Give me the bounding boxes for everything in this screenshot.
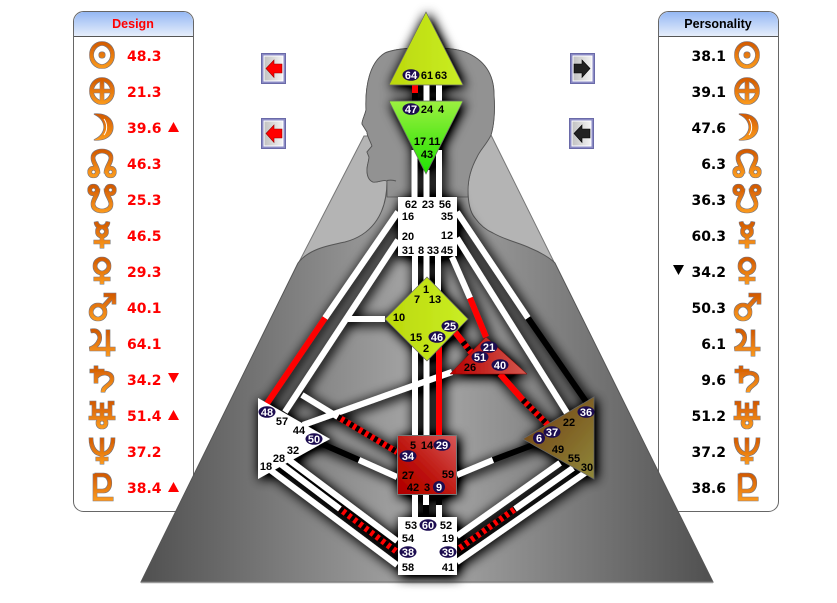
personality column: values: 34.2 (691, 265, 726, 281)
channel: 63-4 (436, 85, 442, 101)
channel: 8-1 (424, 256, 430, 280)
design column: values: 40.1 (127, 301, 162, 317)
sacral gates: 29 (436, 440, 448, 452)
ego gates: 21 (483, 342, 495, 354)
spleen gates: 32 (287, 445, 299, 457)
human silhouette (141, 48, 713, 582)
channel: 25-51 (455, 332, 474, 356)
personality column: values: 38.6 (691, 481, 726, 497)
sacral gates: 34 (402, 451, 415, 463)
channel: 10-34 (302, 395, 397, 452)
sacral gates: 27 (402, 470, 414, 482)
center: solar plexus (523, 397, 594, 479)
design column: values: 64.1 (127, 337, 162, 353)
throat gates: 35 (441, 211, 453, 223)
icon: earth (736, 80, 758, 102)
design column: values: 38.4 (127, 481, 162, 497)
channel: 61-24 (424, 85, 430, 101)
throat gates: 62 (405, 199, 417, 211)
light gray backdrop between head and shoulders (298, 135, 555, 264)
ajna gates: 4 (438, 104, 445, 116)
throat gates: 33 (427, 245, 439, 257)
channel: 32-54 (285, 457, 397, 541)
channel: 44-26 (303, 372, 452, 425)
channel: 35-36 (457, 212, 587, 403)
root gates: 58 (402, 562, 414, 574)
icon: saturn (735, 366, 757, 392)
channel: 20-57 (285, 240, 398, 412)
center: sacral (398, 436, 456, 494)
design column: values: 51.4 (127, 409, 162, 425)
icon: mars (91, 295, 114, 319)
design column: values: 21.3 (127, 85, 162, 101)
sacral gates: 42 (407, 482, 419, 494)
icon: uranus (734, 403, 760, 427)
icon: saturn (90, 366, 112, 392)
solar plexus gates (533, 406, 594, 474)
root gates: 39 (442, 547, 454, 559)
g center gates: 25 (444, 321, 456, 333)
root gates: 41 (442, 562, 454, 574)
heading: Design: Design (112, 17, 154, 31)
throat gates: 45 (441, 245, 453, 257)
sacral gates: 5 (410, 440, 416, 452)
channel: 15-5 (412, 345, 418, 517)
icon: south node (90, 186, 114, 211)
personality column: values: 6.3 (701, 157, 726, 173)
heading: Personality: Personality (684, 17, 752, 31)
throat gates: 12 (441, 230, 453, 242)
g center gates (393, 284, 458, 355)
icon: pluto (740, 474, 758, 499)
center: head (389, 12, 463, 85)
channel: 39-55 (457, 468, 573, 550)
throat gates: 20 (402, 231, 414, 243)
icon: jupiter (735, 330, 760, 356)
icon: mars (736, 295, 759, 319)
personality column: values: 37.2 (691, 445, 726, 461)
personality column: values: 50.3 (691, 301, 726, 317)
spleen gates: 18 (260, 461, 272, 473)
root gates: 38 (402, 547, 414, 559)
design column: values: 46.3 (127, 157, 162, 173)
personality column: values (673, 49, 726, 497)
design column: values (127, 49, 179, 497)
design column: values: 48.3 (127, 49, 162, 65)
center: spleen (258, 398, 330, 479)
icon: south node (735, 186, 759, 211)
icon: neptune (736, 438, 758, 464)
ego gates (464, 341, 508, 374)
solar plexus gates: 30 (581, 462, 593, 474)
root gates: 52 (440, 520, 452, 532)
solar plexus gates: 36 (580, 407, 592, 419)
design column: values: 39.6 (127, 121, 162, 137)
design column: values: 25.3 (127, 193, 162, 209)
design column: values: 37.2 (127, 445, 162, 461)
ajna gates: 24 (421, 104, 434, 116)
personality column: values: 51.2 (691, 409, 726, 425)
center: throat (398, 197, 457, 256)
g center gates: 7 (414, 294, 420, 306)
channel: 59-6 (457, 445, 533, 475)
root gates: 54 (402, 533, 415, 545)
ground line (141, 582, 713, 584)
g center gates: 15 (410, 332, 422, 344)
g center gates: 46 (431, 332, 443, 344)
channel: 46-29 (436, 345, 442, 435)
icon: mercury (94, 222, 110, 248)
channel: 64-47 (412, 85, 418, 101)
sacral gates: 9 (436, 482, 442, 494)
design column: values: 46.5 (127, 229, 162, 245)
spleen gates: 57 (276, 416, 288, 428)
icon: mercury (739, 222, 755, 248)
personality column: values: 39.1 (691, 85, 726, 101)
g center gates: 2 (423, 343, 429, 355)
channel: 21-45 (452, 257, 486, 337)
chin line (387, 179, 396, 182)
body graph (258, 12, 594, 575)
channel: 2-14 (424, 355, 430, 435)
icon: north node (90, 151, 114, 176)
personality column: values: 9.6 (701, 373, 726, 389)
ajna gates (402, 103, 445, 161)
design column: values: 29.3 (127, 265, 162, 281)
ego gates: 51 (474, 352, 486, 364)
channel: 19-49 (457, 463, 560, 536)
ajna gates: 43 (421, 149, 433, 161)
button: design back arrow bottom (262, 118, 286, 148)
channel: 18-58 (263, 464, 397, 565)
root gates: 60 (422, 520, 434, 532)
channel: 11-56 (436, 150, 442, 197)
panel: Personality (658, 12, 778, 512)
channel: 16-48 (266, 212, 398, 405)
throat gates: 8 (418, 245, 424, 257)
head gates: 63 (435, 70, 447, 82)
icon: pluto (95, 474, 113, 499)
icon: sun (736, 44, 758, 66)
personality column: values: 38.1 (691, 49, 726, 65)
design column: values: 34.2 (127, 373, 162, 389)
sacral gates: 3 (424, 482, 430, 494)
channel: 50-27 (320, 443, 397, 477)
design column: planet icons (89, 44, 115, 499)
panel: Design (74, 12, 194, 512)
channel: 40-37 (500, 374, 548, 425)
ego gates: 40 (494, 360, 506, 372)
head shading (362, 48, 494, 197)
center: g (385, 277, 468, 361)
ajna gates: 11 (429, 136, 440, 148)
channel: 17-62 (412, 150, 418, 197)
spleen gates (258, 406, 322, 473)
g center gates: 10 (393, 312, 405, 324)
icon: earth (92, 80, 112, 102)
channel: 31-7 (412, 256, 418, 300)
icon: neptune (91, 438, 113, 464)
solar plexus gates: 37 (546, 427, 558, 439)
icon: sun (92, 44, 112, 66)
channel: 33-13 (435, 256, 441, 300)
solar plexus gates: 49 (552, 444, 564, 456)
center: root (398, 517, 457, 575)
throat gates: 31 (402, 245, 414, 257)
channel: 41-30 (457, 473, 585, 562)
personality column: values: 36.3 (691, 193, 726, 209)
root gates: 53 (405, 520, 417, 532)
channel: 9-52 (436, 495, 442, 517)
button: personality forward arrow (570, 54, 594, 84)
head gates (402, 69, 447, 82)
head gates: 61 (421, 70, 433, 82)
root gates (400, 519, 456, 574)
spleen gates: 44 (293, 425, 306, 437)
icon: moon (94, 114, 113, 140)
personality column: values: 6.1 (701, 337, 726, 353)
spleen gates: 28 (273, 453, 285, 465)
channel: 12-22 (457, 238, 567, 413)
spleen gates: 48 (261, 407, 273, 419)
icon: venus (739, 259, 755, 284)
button: personality back arrow (570, 118, 594, 148)
icon: venus (94, 259, 110, 284)
spleen gates: 50 (308, 434, 320, 446)
throat gates (402, 199, 453, 257)
throat gates: 23 (422, 199, 434, 211)
icon: uranus (89, 403, 115, 427)
button: design back arrow top (262, 54, 286, 84)
personality column: values: 60.3 (691, 229, 726, 245)
root gates: 19 (442, 533, 454, 545)
g center gates: 13 (429, 294, 441, 306)
throat gates: 16 (402, 211, 414, 223)
channel: 28-38 (270, 456, 397, 552)
solar plexus gates: 6 (536, 433, 542, 445)
center: ego (450, 337, 527, 374)
sacral gates (400, 439, 454, 494)
throat gates: 56 (439, 199, 451, 211)
solar plexus gates: 55 (568, 453, 580, 465)
head gates: 64 (405, 70, 418, 82)
icon: moon (739, 114, 758, 140)
channel: 10-57 (348, 316, 385, 322)
ego gates: 26 (464, 362, 476, 374)
ajna gates: 17 (414, 136, 426, 148)
icon: north node (735, 151, 759, 176)
personality column: planet icons (734, 44, 760, 499)
center: ajna (389, 101, 463, 174)
g center gates: 1 (423, 284, 429, 296)
sacral gates: 59 (442, 469, 454, 481)
channel: 3-60 (423, 495, 429, 517)
channel: 43-23 (424, 170, 430, 197)
solar plexus gates: 22 (563, 417, 575, 429)
sacral gates: 14 (421, 440, 434, 452)
personality column: values: 47.6 (691, 121, 726, 137)
ajna gates: 47 (405, 104, 417, 116)
icon: jupiter (90, 330, 115, 356)
